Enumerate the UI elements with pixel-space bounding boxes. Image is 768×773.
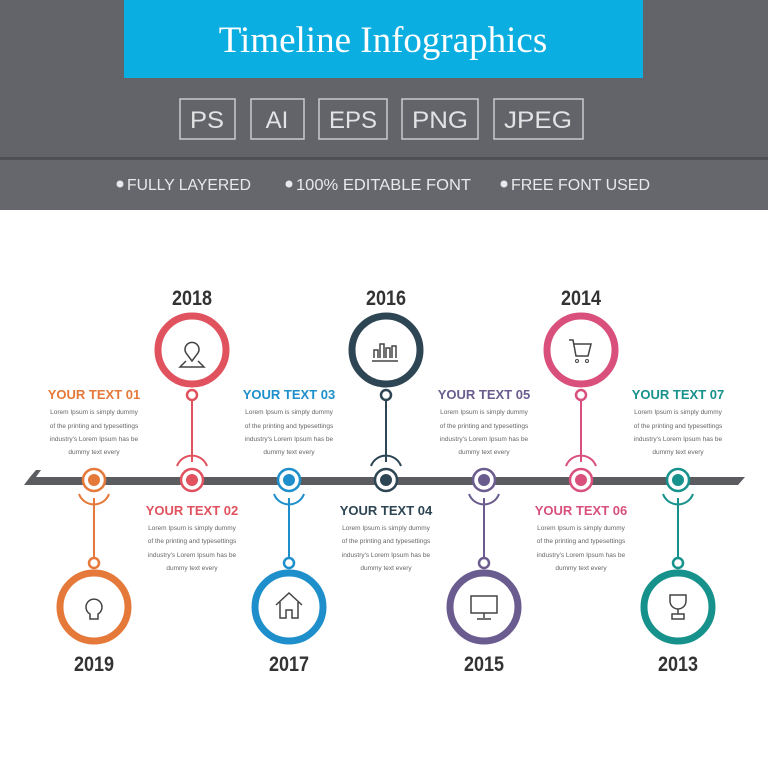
text 07: industry's Lorem Ipsum has be: [634, 436, 723, 443]
milestone 2017 (bottom): [255, 469, 323, 676]
text 02: industry's Lorem Ipsum has be: [148, 552, 237, 559]
header band: [0, 0, 768, 210]
text 01: Lorem Ipsum is simply dummy: [50, 409, 139, 416]
text 06: dummy text every: [555, 565, 607, 572]
text 04: industry's Lorem Ipsum has be: [342, 552, 431, 559]
milestone 2019 (bottom): [60, 469, 128, 676]
format badges: AI: [266, 107, 288, 134]
feature bullets: FREE FONT USED: [511, 177, 650, 194]
milestone 2016 (top): [352, 287, 420, 491]
title: [124, 0, 643, 78]
text 02: of the printing and typesettings: [148, 538, 237, 545]
milestone 2016 (top): 2016: [366, 287, 406, 310]
milestone 2017 (bottom): 2017: [269, 653, 309, 676]
milestone 2019 (bottom): 2019: [74, 653, 114, 676]
text 06: YOUR TEXT 06: [535, 503, 627, 518]
text 02: dummy text every: [166, 565, 218, 572]
feature bullets: FULLY LAYERED: [127, 177, 251, 194]
format badges: [180, 99, 583, 139]
format badges: PS: [190, 107, 224, 134]
format badges: JPEG: [504, 107, 572, 134]
text 01: [48, 387, 140, 456]
text 02: [146, 503, 238, 572]
milestone 2013 (bottom): [644, 469, 712, 676]
text 07: Lorem Ipsum is simply dummy: [634, 409, 723, 416]
text 07: [632, 387, 724, 456]
milestone 2013 (bottom): 2013: [658, 653, 698, 676]
text 04: YOUR TEXT 04: [340, 503, 433, 518]
text 03: Lorem Ipsum is simply dummy: [245, 409, 334, 416]
text blocks: [48, 387, 724, 572]
milestone 2015 (bottom): [450, 469, 518, 676]
text 05: YOUR TEXT 05: [438, 387, 530, 402]
text 04: [340, 503, 433, 572]
format badges: PNG: [412, 107, 468, 134]
text 03: YOUR TEXT 03: [243, 387, 335, 402]
text 07: YOUR TEXT 07: [632, 387, 724, 402]
text 06: [535, 503, 627, 572]
text 02: YOUR TEXT 02: [146, 503, 238, 518]
text 07: of the printing and typesettings: [634, 423, 723, 430]
text 06: Lorem Ipsum is simply dummy: [537, 525, 626, 532]
text 04: Lorem Ipsum is simply dummy: [342, 525, 431, 532]
title: Timeline Infographics: [219, 20, 547, 61]
text 05: Lorem Ipsum is simply dummy: [440, 409, 529, 416]
text 01: of the printing and typesettings: [50, 423, 139, 430]
text 07: dummy text every: [652, 449, 704, 456]
text 03: dummy text every: [263, 449, 315, 456]
timeline axis: [24, 470, 745, 485]
text 06: industry's Lorem Ipsum has be: [537, 552, 626, 559]
text 03: industry's Lorem Ipsum has be: [245, 436, 334, 443]
text 01: YOUR TEXT 01: [48, 387, 140, 402]
text 04: dummy text every: [360, 565, 412, 572]
text 04: of the printing and typesettings: [342, 538, 431, 545]
text 01: dummy text every: [68, 449, 120, 456]
milestone 2018 (top): [158, 287, 226, 491]
milestone 2014 (top): 2014: [561, 287, 601, 310]
text 03: of the printing and typesettings: [245, 423, 334, 430]
format badges: EPS: [329, 107, 377, 134]
text 06: of the printing and typesettings: [537, 538, 626, 545]
milestone 2014 (top): [547, 287, 615, 491]
milestone 2018 (top): 2018: [172, 287, 212, 310]
feature bullets: [116, 177, 650, 194]
text 02: Lorem Ipsum is simply dummy: [148, 525, 237, 532]
text 05: industry's Lorem Ipsum has be: [440, 436, 529, 443]
feature bullets: 100% EDITABLE FONT: [296, 177, 471, 194]
milestone 2015 (bottom): 2015: [464, 653, 504, 676]
text 05: dummy text every: [458, 449, 510, 456]
text 03: [243, 387, 335, 456]
text 01: industry's Lorem Ipsum has be: [50, 436, 139, 443]
text 05: [438, 387, 530, 456]
text 05: of the printing and typesettings: [440, 423, 529, 430]
